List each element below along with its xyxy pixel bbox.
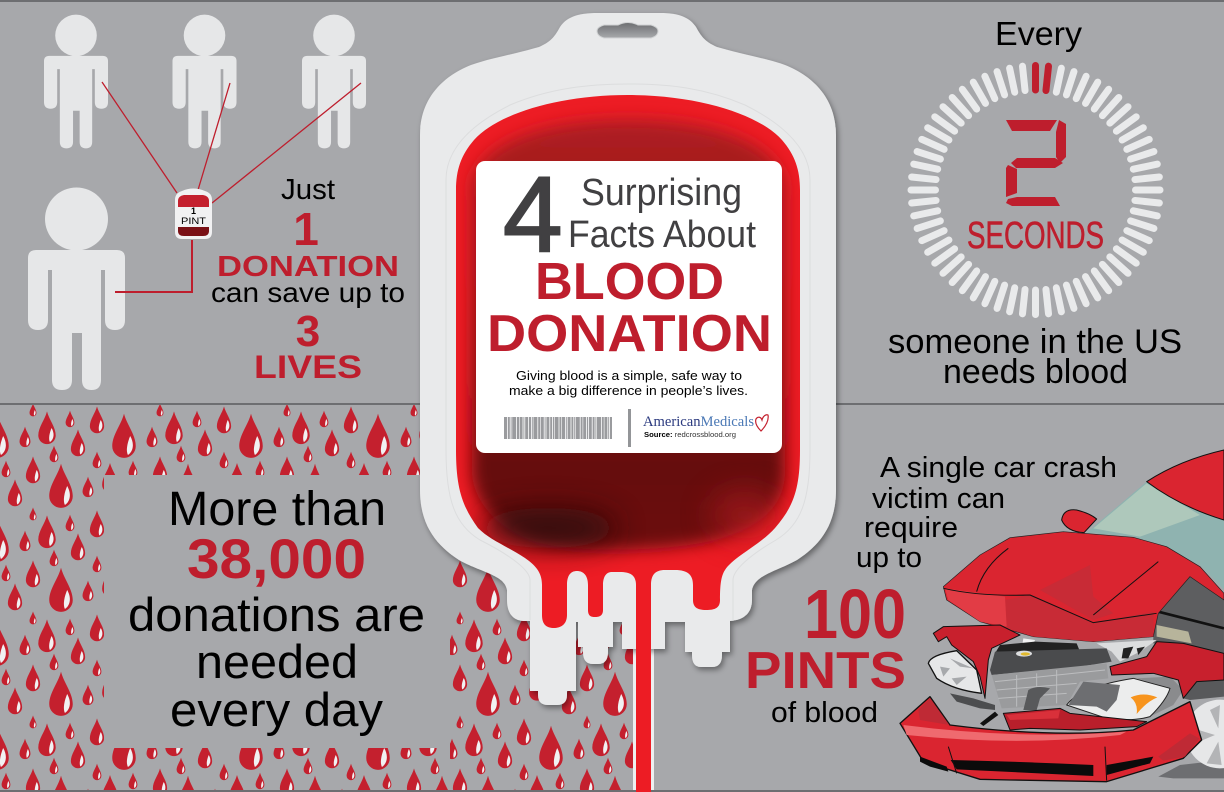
- panel: car crash text: 100: [804, 575, 906, 653]
- engine block: [990, 648, 1112, 675]
- title: BLOOD: [535, 253, 724, 311]
- panel: car crash text: victim can: [872, 483, 1005, 515]
- right headlight: [1137, 677, 1183, 717]
- label divider: [628, 409, 631, 447]
- intro text: make a big difference in people’s lives.: [509, 383, 748, 398]
- title: Surprising: [581, 172, 742, 214]
- panel: car crash text: require: [864, 512, 958, 544]
- panel: 38,000 donations text: needed: [196, 635, 358, 688]
- roof: [1147, 450, 1224, 520]
- crumpled metal lower: [1003, 708, 1147, 730]
- panel: one donation saves three lives: [28, 15, 405, 390]
- panel: 38,000 donations text: every day: [170, 683, 384, 736]
- logo: American Medicals: AmericanMedicals: [643, 414, 754, 430]
- label card: [476, 154, 782, 453]
- text: just 1 donation can save up to 3 lives: Just: [281, 174, 335, 206]
- panel: every 2 seconds: [888, 15, 1182, 391]
- wheel well: [1153, 577, 1224, 653]
- text: every: Every: [995, 15, 1083, 52]
- barcode: [504, 417, 612, 439]
- intro text: [509, 368, 748, 398]
- icon: one pint bag: [175, 188, 212, 239]
- tyre shadow: [1158, 760, 1224, 778]
- title: DONATION: [487, 305, 772, 363]
- icon: one pint bag: PINT: [181, 216, 207, 226]
- bag inner contour: [446, 84, 810, 620]
- text: just 1 donation can save up to 3 lives: LIVES: [254, 349, 362, 385]
- left headlight: [928, 651, 982, 693]
- mirror: [1062, 510, 1097, 533]
- wheel: [1186, 700, 1224, 768]
- panel: car crash text: of blood: [771, 697, 878, 729]
- blood fill: [456, 95, 800, 792]
- text: someone in the US needs blood: [888, 323, 1182, 391]
- panel: car crash text: PINTS: [745, 642, 906, 700]
- text: just 1 donation can save up to 3 lives: DONATION: [217, 251, 399, 283]
- panel: car crash text: up to: [856, 542, 922, 574]
- text: just 1 donation can save up to 3 lives: [211, 174, 405, 385]
- panel: car crash text: A single car crash: [880, 452, 1117, 484]
- title: [487, 154, 772, 363]
- text: just 1 donation can save up to 3 lives: can save up to: [211, 277, 405, 308]
- panel: car crash text: [745, 452, 1117, 729]
- car upper body: [943, 450, 1224, 653]
- panel: 38,000 donations text: [128, 483, 425, 736]
- connector lines: [102, 82, 361, 292]
- digital numeral 2: [1006, 120, 1066, 206]
- title: Facts About: [568, 214, 756, 256]
- blood bag: [420, 13, 836, 792]
- hood: [943, 532, 1224, 642]
- intro text: Giving blood is a simple, safe way to: [516, 368, 742, 383]
- hanger slot: [597, 22, 658, 38]
- icon: recipient two: [172, 15, 237, 148]
- crumpled metal left: [933, 625, 1020, 698]
- bumper: [900, 697, 1202, 782]
- panel: 38,000 donations text: 38,000: [187, 527, 366, 590]
- title: 4: [503, 154, 563, 274]
- text: someone in the US needs blood: needs blood: [943, 353, 1128, 391]
- panel: 38,000 donations text: donations are: [128, 588, 425, 641]
- icon: recipient one: [44, 15, 108, 148]
- text: just 1 donation can save up to 3 lives: 1: [293, 203, 319, 255]
- blood drop pattern: [0, 405, 633, 792]
- windshield: [1087, 482, 1224, 590]
- blood tube guide lines: [633, 640, 654, 790]
- text: someone in the US needs blood: someone in the US: [888, 323, 1182, 361]
- car front wreckage: [900, 625, 1224, 782]
- bumper vents: [920, 757, 1153, 776]
- panel: 38,000 donations text: More than: [168, 483, 386, 536]
- crumpled metal right: [1110, 642, 1224, 698]
- illustration: crashed red car: [900, 450, 1224, 782]
- radiator grille: [992, 663, 1108, 708]
- icon: one pint bag: 1: [191, 206, 196, 216]
- battery cap: [1016, 651, 1032, 657]
- icon: recipient three: [302, 15, 366, 148]
- upper engine bay: [1022, 638, 1035, 650]
- source: Source: redcrossblood.org: [644, 430, 736, 439]
- dark undercarriage: [950, 693, 995, 710]
- dark right gap: [1183, 680, 1224, 700]
- timer ring: [911, 66, 1160, 314]
- text: just 1 donation can save up to 3 lives: 3: [296, 307, 320, 356]
- bag body: [420, 13, 836, 705]
- text: seconds: SECONDS: [967, 215, 1104, 257]
- icon: donor: [28, 188, 125, 390]
